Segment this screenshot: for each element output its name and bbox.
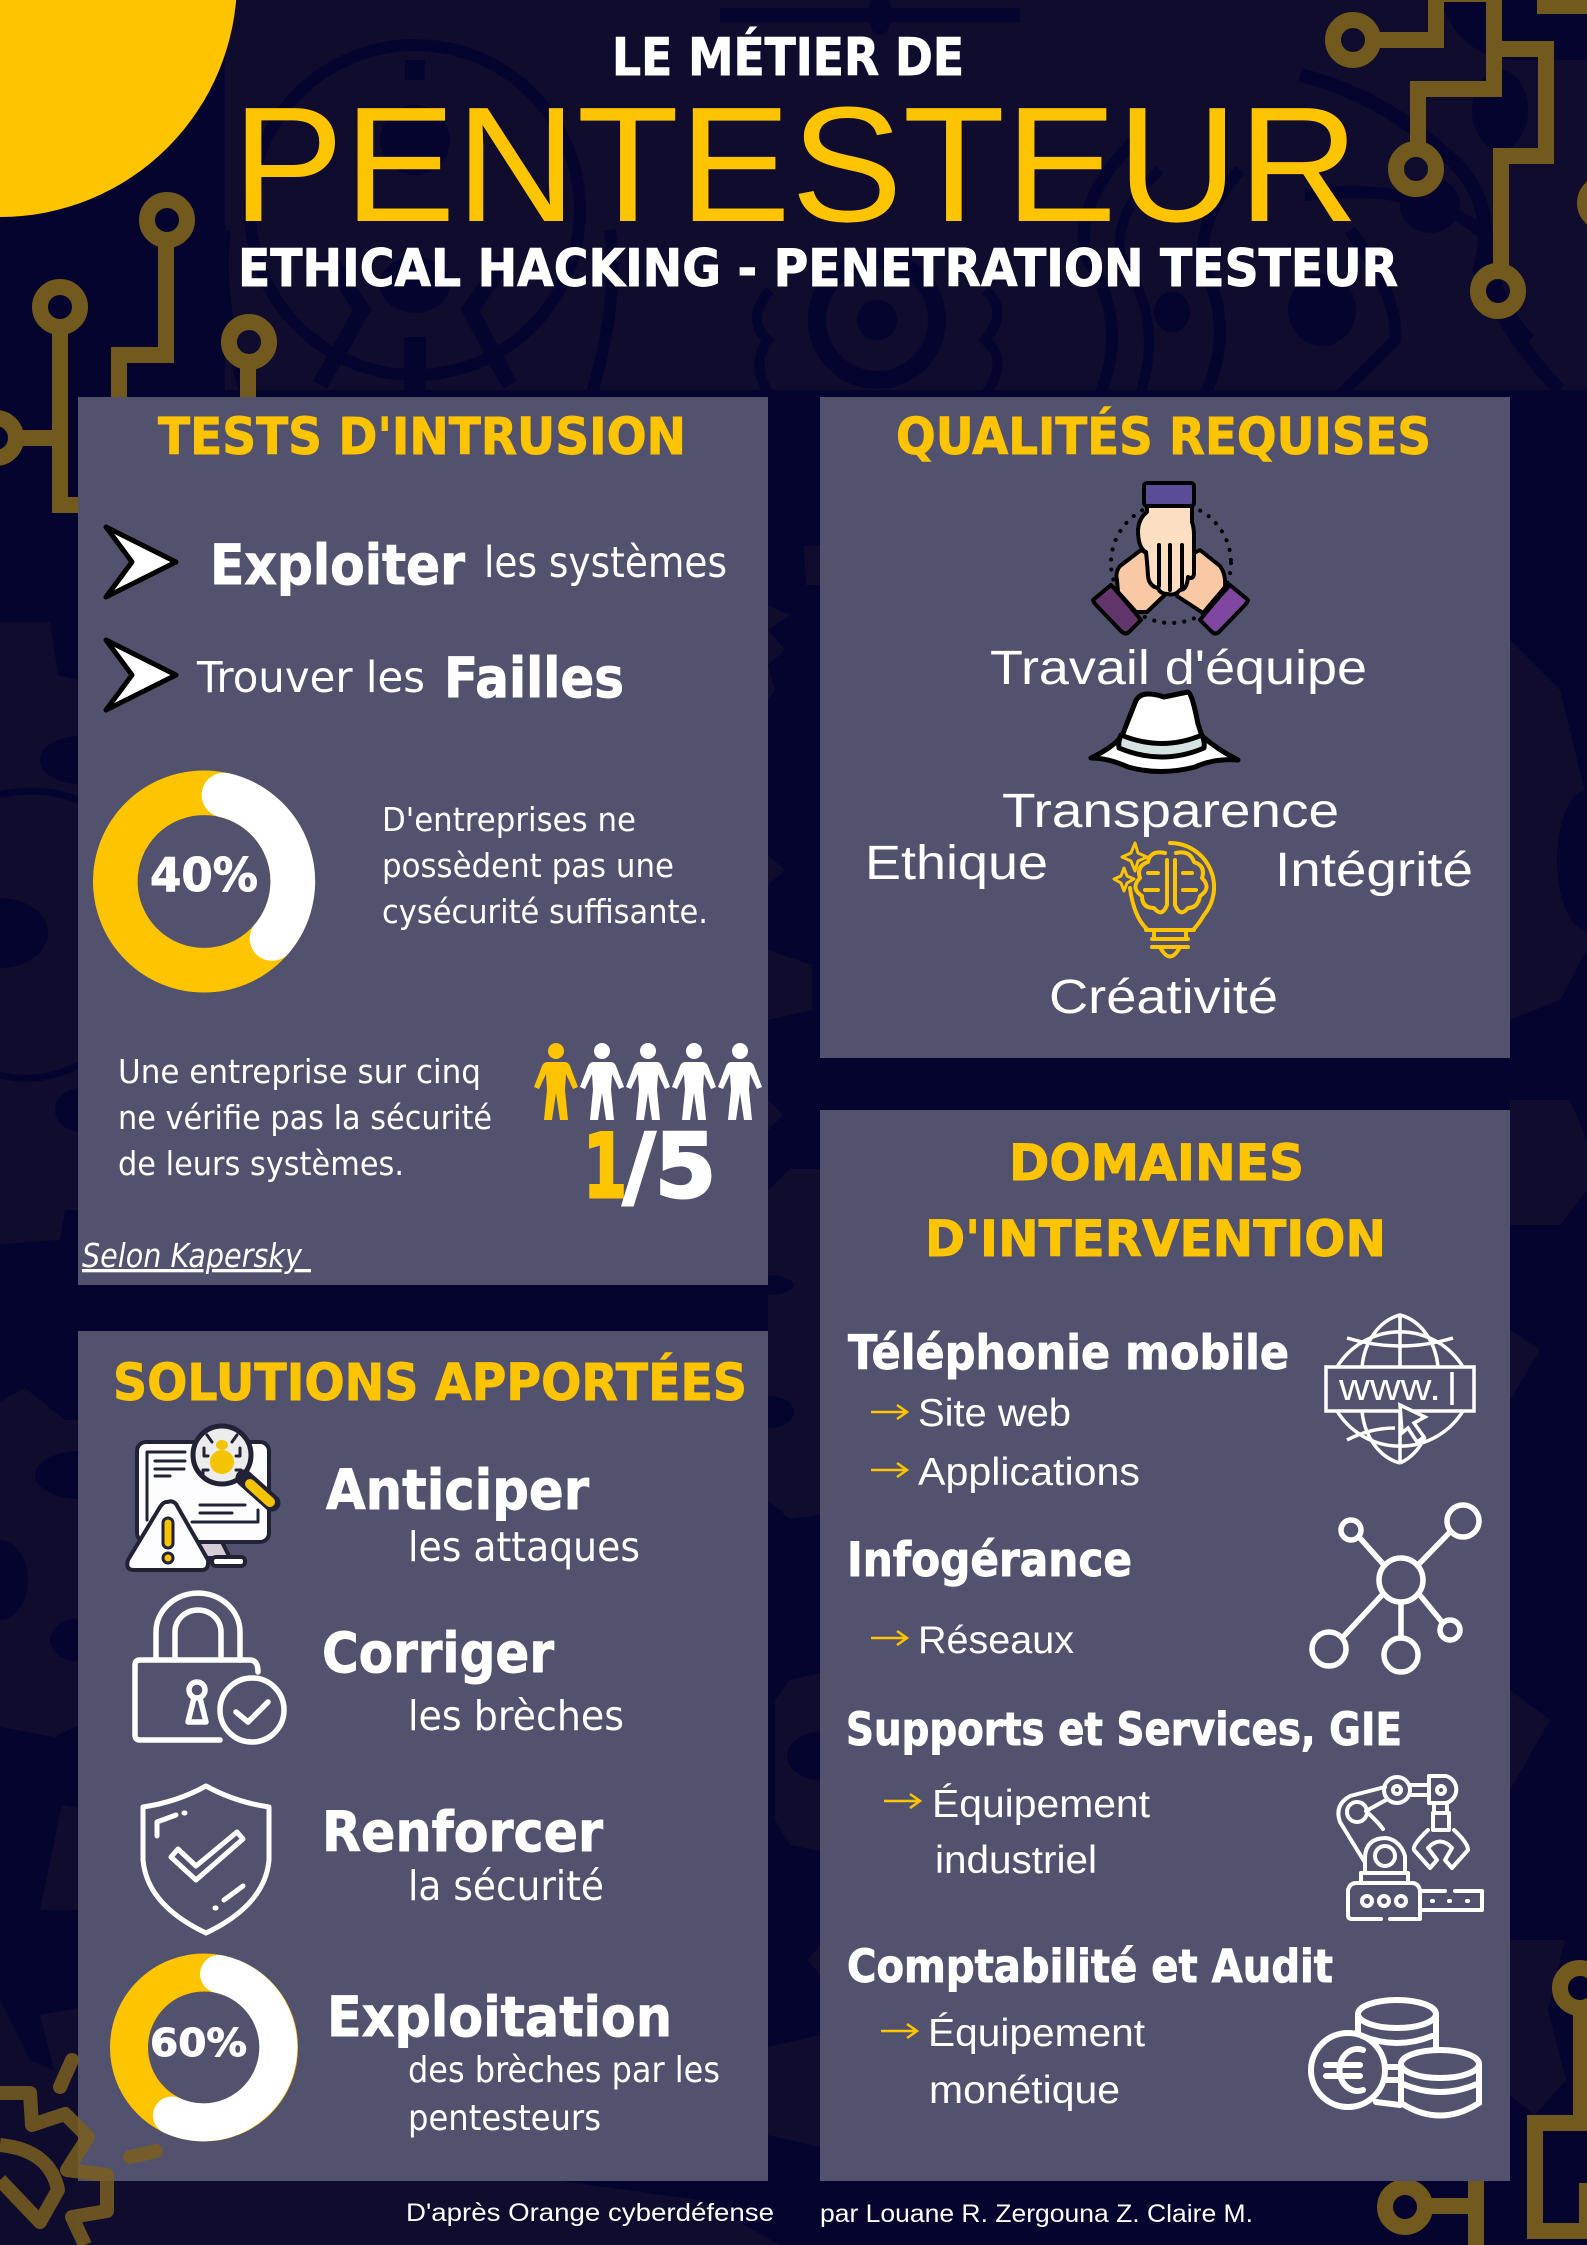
text: une entreprise sur cinq bbox=[118, 1052, 492, 1183]
text: entreprises: cysécurité suffisante. bbox=[382, 892, 708, 931]
panel: tests d'intrusion bbox=[78, 397, 768, 1285]
circuit traces top left bbox=[0, 200, 269, 505]
donut chart: 40%: 40% bbox=[150, 848, 258, 902]
icon: team hands bbox=[1093, 483, 1248, 634]
text: une entreprise sur cinq: Une entreprise sur cinq bbox=[118, 1052, 481, 1091]
subtitle: ETHICAL HACKING - PENETRATION TESTEUR bbox=[238, 239, 1398, 299]
label: créativité: Créativité bbox=[1049, 971, 1278, 1024]
icon: bug monitor bbox=[127, 1426, 272, 1570]
footer: authors: par Louane R. Zergouna Z. Claire M. bbox=[820, 2200, 1253, 2228]
text: une entreprise sur cinq: de leurs systèmes. bbox=[118, 1144, 404, 1183]
donut chart: 60%: 60% bbox=[150, 2021, 247, 2065]
heading: domaines d'intervention: DOMAINES bbox=[1009, 1134, 1304, 1192]
arrow: réseaux bbox=[871, 1631, 907, 1645]
text: anticiper les attaques: les attaques bbox=[408, 1523, 640, 1571]
arrow: équipement monétique bbox=[881, 2024, 917, 2038]
text: trouver les failles bbox=[196, 646, 624, 710]
text: équipement monétique: monétique bbox=[929, 2069, 1120, 2112]
text: entreprises bbox=[382, 800, 708, 931]
donut chart: 40% bbox=[115, 793, 293, 970]
label: intégrité: Intégrité bbox=[1275, 844, 1473, 897]
icon: five people bbox=[534, 1043, 762, 1120]
icon: www globe bbox=[1326, 1315, 1474, 1463]
text: exploitation des brèches bbox=[327, 1985, 720, 2139]
text: réseaux: Réseaux bbox=[918, 1619, 1074, 1662]
text: exploitation des brèches: pentesteurs bbox=[408, 2098, 601, 2139]
text: comptabilité et audit: Comptabilité et Audit bbox=[847, 1940, 1333, 1993]
arrow: applications bbox=[871, 1463, 907, 1477]
heading: tests d'intrusion: TESTS D'INTRUSION bbox=[158, 408, 686, 467]
text: entreprises: possèdent pas une bbox=[382, 846, 674, 885]
icon: coins bbox=[1311, 2000, 1479, 2116]
text: anticiper les attaques bbox=[326, 1458, 640, 1571]
arrow: site web bbox=[871, 1405, 907, 1419]
icon: arrow 2 bbox=[106, 640, 176, 710]
text: corriger les brèches bbox=[322, 1621, 624, 1740]
text: exploitation des brèches: des brèches par les bbox=[408, 2050, 720, 2091]
text: exploiter les systèmes: Exploiter bbox=[210, 533, 465, 597]
arrow: équipement industriel bbox=[884, 1794, 920, 1808]
text: trouver les failles: Failles bbox=[444, 646, 624, 710]
text: supports et services: Supports et Services, GIE bbox=[846, 1703, 1402, 1756]
icon: network bbox=[1312, 1505, 1479, 1672]
text: anticiper les attaques: Anticiper bbox=[326, 1458, 589, 1522]
text: exploiter les systèmes bbox=[210, 533, 727, 597]
text: exploitation des brèches: Exploitation bbox=[327, 1985, 672, 2049]
heading: qualités requises: QUALITÉS REQUISES bbox=[896, 406, 1431, 467]
text: applications: Applications bbox=[918, 1451, 1140, 1494]
text: entreprises: D'entreprises ne bbox=[382, 800, 636, 839]
stat: 1/5: /5 bbox=[623, 1115, 716, 1218]
icon: industrial robot bbox=[1338, 1776, 1482, 1919]
icon: white hat bbox=[1091, 692, 1238, 772]
heading: domaines d'intervention bbox=[925, 1134, 1386, 1268]
panel: qualités requises bbox=[820, 397, 1510, 1058]
title: le métier de: LE MÉTIER DE bbox=[612, 27, 964, 88]
text: corriger les brèches: les brèches bbox=[408, 1692, 624, 1740]
text: équipement monétique: Équipement bbox=[928, 2012, 1145, 2055]
stat: 1/5 bbox=[583, 1115, 716, 1218]
donut chart: 60% bbox=[129, 1972, 279, 2122]
text: renforcer la sécurité: la sécurité bbox=[408, 1862, 604, 1910]
text: équipement monétique bbox=[928, 2012, 1145, 2112]
text: site web: Site web bbox=[918, 1392, 1071, 1435]
icon: padlock bbox=[135, 1593, 284, 1742]
text: trouver les failles: Trouver les bbox=[196, 653, 425, 703]
text: renforcer la sécurité bbox=[322, 1800, 604, 1910]
panel: solutions apportées bbox=[78, 1331, 768, 2181]
footer: source: D'après Orange cyberdéfense bbox=[406, 2199, 774, 2227]
text: équipement industriel bbox=[932, 1783, 1150, 1882]
text: infogérance: Infogérance bbox=[847, 1533, 1132, 1588]
source: selon kapersky: Selon Kapersky bbox=[82, 1236, 311, 1275]
icon: arrow 1 bbox=[106, 527, 176, 597]
stat: 1/5: 1 bbox=[583, 1115, 627, 1218]
decorative gear bottom left bbox=[0, 2060, 156, 2245]
text: équipement industriel: Équipement bbox=[932, 1783, 1150, 1826]
text: équipement industriel: industriel bbox=[935, 1839, 1097, 1882]
text: téléphonie mobile: Téléphonie mobile bbox=[848, 1326, 1289, 1381]
circuit traces top right bbox=[1333, 0, 1587, 311]
label: transparence: Transparence bbox=[1002, 785, 1339, 838]
decorative sun circle bbox=[0, 0, 237, 217]
panel: domaines d'intervention bbox=[820, 1110, 1510, 2181]
label: travail d'équipe: Travail d'équipe bbox=[990, 642, 1367, 695]
text: renforcer la sécurité: Renforcer bbox=[322, 1800, 603, 1864]
heading: solutions apportées: SOLUTIONS APPORTÉES bbox=[113, 1352, 747, 1413]
circuit traces bottom right bbox=[1385, 1968, 1587, 2245]
label: ethique: Ethique bbox=[865, 837, 1048, 890]
text: exploiter les systèmes: les systèmes bbox=[484, 538, 727, 588]
icon: shield bbox=[143, 1786, 269, 1933]
icon: www globe: www. bbox=[1338, 1367, 1441, 1409]
icon: brain light bulb bbox=[1114, 843, 1214, 956]
title: pentesteur: PENTESTEUR bbox=[232, 73, 1359, 256]
text: une entreprise sur cinq: ne vérifie pas la sécurité bbox=[118, 1098, 492, 1137]
text: corriger les brèches: Corriger bbox=[322, 1621, 554, 1685]
heading: domaines d'intervention: D'INTERVENTION bbox=[925, 1210, 1386, 1268]
